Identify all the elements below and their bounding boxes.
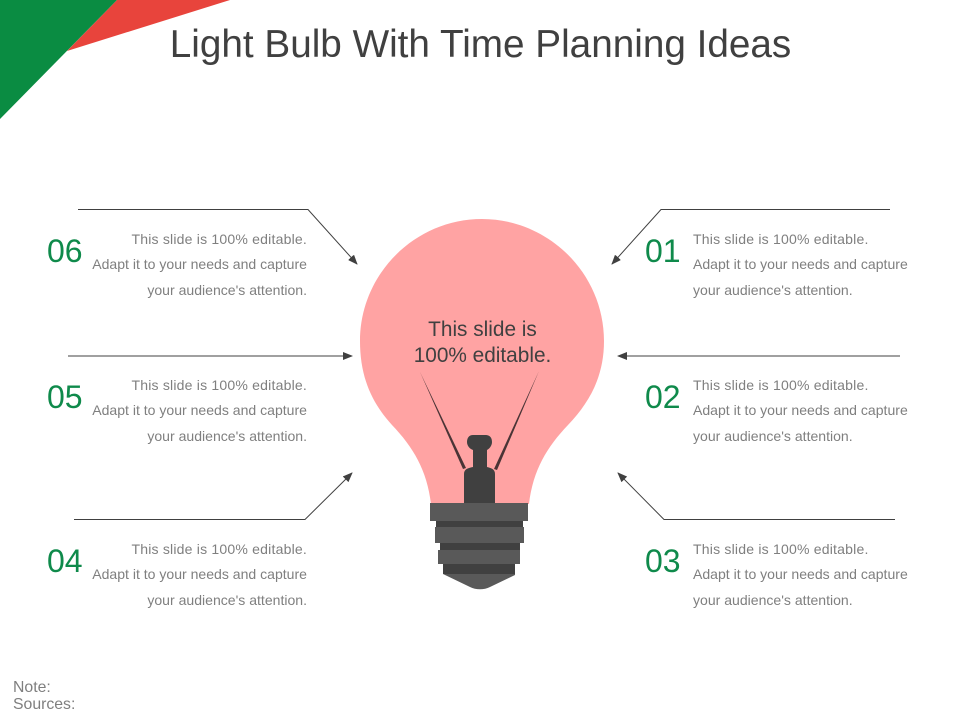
item 06: your audience's attention. — [147, 282, 307, 298]
item 05: This slide is 100% editable. — [131, 376, 307, 392]
title: Light Bulb With Time Planning Ideas — [170, 23, 791, 66]
arrow 03 — [618, 473, 895, 520]
item 03: 03 — [645, 543, 681, 579]
center label: This slide is — [428, 318, 537, 341]
item 04: your audience's attention. — [147, 592, 307, 608]
bulb glass — [360, 219, 604, 504]
item 05: 05 — [47, 379, 83, 415]
item 02: Adapt it to your needs and capture — [693, 402, 908, 418]
item 06: Adapt it to your needs and capture — [92, 256, 307, 272]
arrow 05 — [68, 355, 352, 357]
footnote — [13, 679, 75, 713]
item 06: 06 — [47, 233, 83, 269]
item 02: This slide is 100% editable. — [693, 376, 869, 392]
filament post — [464, 435, 495, 505]
arrow 01 — [612, 210, 890, 264]
item 06: This slide is 100% editable. — [131, 230, 307, 246]
center label: 100% editable. — [414, 344, 551, 366]
screw base — [430, 503, 528, 589]
item 04: Adapt it to your needs and capture — [92, 566, 307, 582]
footnote: Sources: — [13, 696, 75, 713]
item 01 — [645, 230, 908, 298]
item 04 — [47, 540, 307, 608]
item 05: Adapt it to your needs and capture — [92, 402, 307, 418]
item 02: your audience's attention. — [693, 428, 853, 444]
item 06 — [47, 230, 307, 298]
corner decoration — [0, 0, 230, 119]
arrow 06 — [78, 210, 357, 264]
filament wires — [420, 371, 539, 470]
item 04: 04 — [47, 543, 83, 579]
item 03: This slide is 100% editable. — [693, 540, 869, 556]
item 03 — [645, 540, 908, 608]
item 01: This slide is 100% editable. — [693, 230, 869, 246]
item 02 — [645, 376, 908, 444]
item 01: 01 — [645, 233, 681, 269]
footnote: Note: — [13, 679, 51, 696]
item 01: your audience's attention. — [693, 282, 853, 298]
arrow 02 — [618, 355, 900, 357]
item 02: 02 — [645, 379, 681, 415]
item 03: Adapt it to your needs and capture — [693, 566, 908, 582]
item 05 — [47, 376, 307, 444]
item 03: your audience's attention. — [693, 592, 853, 608]
item 04: This slide is 100% editable. — [131, 540, 307, 556]
item 05: your audience's attention. — [147, 428, 307, 444]
center label — [414, 318, 551, 366]
arrow 04 — [74, 473, 352, 520]
item 01: Adapt it to your needs and capture — [693, 256, 908, 272]
